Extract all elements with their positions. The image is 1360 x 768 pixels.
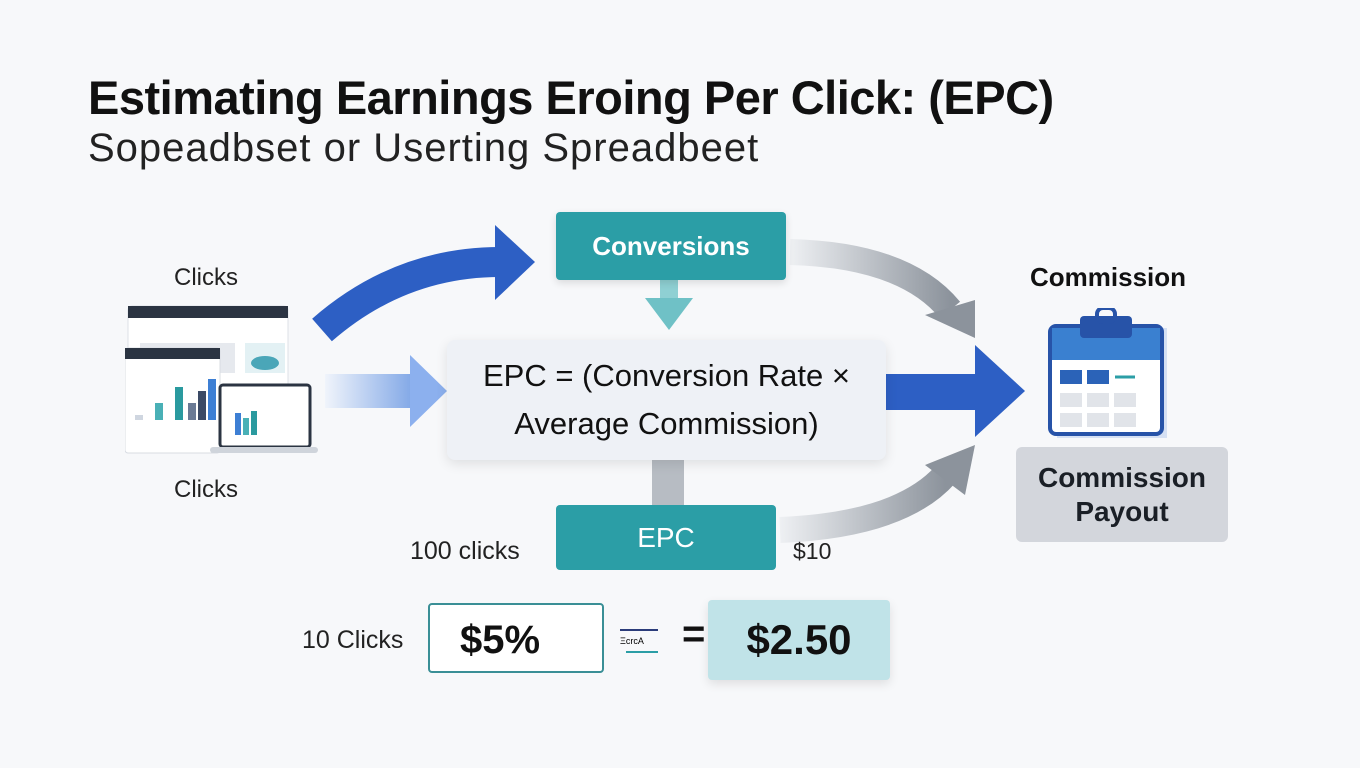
arrow: clicks to conversions (322, 225, 535, 330)
label: $10: $10 (793, 538, 831, 564)
box: EPC formula: EPC = (Conversion Rate × (483, 358, 850, 393)
arrow: conversions to commission (grey) (790, 252, 975, 338)
label: 100 clicks: 100 clicks (410, 537, 520, 565)
arrow: EPC to payout (grey) (780, 445, 975, 530)
equals sign: = (682, 612, 705, 656)
connector (652, 455, 684, 510)
label: 10 clicks: 10 Clicks (302, 626, 403, 654)
label: clicks bottom: Clicks (174, 476, 238, 503)
box: EPC: EPC (637, 522, 695, 552)
box: commission payout: Payout (1075, 496, 1169, 526)
title: Estimating Earnings Eroing Per Click: (EPC) (88, 71, 1054, 124)
box: conversions (556, 212, 786, 280)
box: $5% (428, 603, 604, 673)
arrow: formula to commission (886, 345, 1025, 437)
label: commission: Commission (1030, 262, 1186, 292)
box: $5%: $5% (460, 618, 540, 662)
box: EPC formula (447, 340, 886, 460)
icon: small arrows: ΞcrcA (620, 636, 644, 646)
box: EPC formula: Average Commission) (514, 406, 819, 441)
icon: devices (125, 306, 318, 454)
arrow: light blue into formula (325, 355, 447, 427)
box: conversions: Conversions (592, 230, 750, 260)
arrow: conversions down (645, 280, 693, 330)
box: result: $2.50 (746, 616, 852, 663)
subtitle: Sopeadbset or Userting Spreadbeet (88, 126, 759, 170)
box: commission payout: Commission (1038, 462, 1206, 492)
label: clicks top: Clicks (174, 264, 238, 291)
icon: clipboard (1048, 308, 1167, 438)
box: commission payout (1016, 447, 1228, 542)
box: result (708, 600, 890, 680)
box: EPC (556, 505, 776, 570)
icon: small arrows (620, 629, 658, 653)
